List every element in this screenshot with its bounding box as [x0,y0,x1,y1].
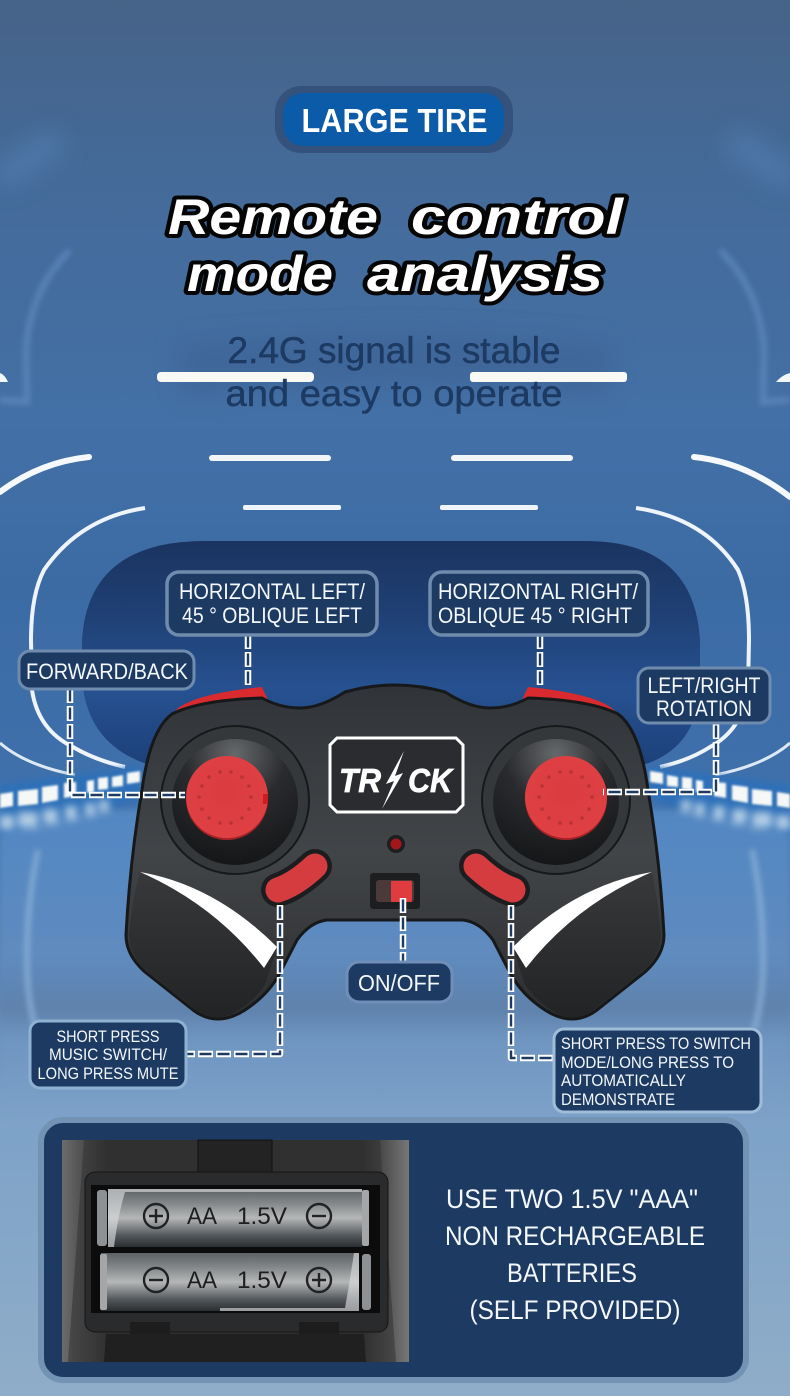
battery note: NON RECHARGEABLE [445,1221,705,1251]
label: left/right rotation: ROTATION [656,696,752,721]
label: horizontal left: 45 ° OBLIQUE LEFT [182,603,362,628]
remote controller [126,685,664,1019]
LED [387,835,405,853]
subtitle: 2.4G signal is stable [228,330,560,371]
label: horizontal right: OBLIQUE 45 ° RIGHT [438,603,632,628]
battery compartment photo [62,1140,409,1362]
left joystick [161,726,309,874]
battery markings: AA [187,1203,217,1230]
left white swoosh [140,872,277,968]
connector lines [70,634,716,1058]
side white arcs [31,508,145,767]
title [168,189,624,302]
battery note: USE TWO 1.5V "AAA" [446,1184,698,1214]
subtitle [226,330,562,414]
label: on/off [347,962,452,1002]
TRACK logo: TR [339,762,381,799]
label: left/right rotation [638,668,770,723]
label: music switch: MUSIC SWITCH/ [49,1046,167,1064]
left grip [129,872,277,1017]
power switch [370,873,420,909]
battery note: (SELF PROVIDED) [470,1295,680,1325]
label: music switch: SHORT PRESS [56,1028,160,1046]
label: forward/back: FORWARD/BACK [26,659,188,684]
right white swoosh [513,872,652,968]
panel: batteries [41,1120,746,1380]
battery markings: 1.5V [237,1267,287,1294]
label: music switch: LONG PRESS MUTE [38,1065,178,1083]
controller body [126,685,664,1019]
soft outer arches [0,250,790,402]
title: mode [187,246,333,302]
label: forward/back [19,651,194,689]
TRACK logo [330,738,463,812]
label: mode switch: MODE/LONG PRESS TO [561,1054,734,1072]
right joystick [482,726,630,874]
battery note [445,1184,705,1325]
right red button [476,866,513,890]
battery note: BATTERIES [507,1258,637,1288]
floor [0,810,790,1130]
label: mode switch: DEMONSTRATE [561,1091,675,1109]
label: horizontal right [430,572,648,635]
right grip [513,872,661,1017]
battery markings: 1.5V [237,1203,287,1230]
central recess [82,541,700,770]
light strips [0,766,790,835]
label: horizontal right: HORIZONTAL RIGHT/ [438,579,639,604]
battery markings: AA [187,1267,217,1294]
label: mode switch: SHORT PRESS TO SWITCH [561,1035,751,1053]
badge: LARGE TIRE [275,86,513,153]
white dashes [157,372,314,382]
label: on/off: ON/OFF [358,970,440,996]
left red button [278,866,315,890]
shoulder buttons [174,687,268,716]
label: mode switch [554,1029,761,1112]
subtitle: and easy to operate [226,373,562,414]
title: Remote [168,189,378,245]
badge: LARGE TIRE: LARGE TIRE [302,102,488,139]
label: horizontal left [167,572,377,635]
label: mode switch: AUTOMATICALLY [561,1072,686,1090]
title: analysis [367,246,603,302]
title: control [411,189,624,245]
label: horizontal left: HORIZONTAL LEFT/ [179,579,366,604]
battery markings [144,1203,331,1294]
TRACK logo: CK [408,762,454,799]
label: music switch [30,1021,186,1088]
label: left/right rotation: LEFT/RIGHT [648,673,760,698]
